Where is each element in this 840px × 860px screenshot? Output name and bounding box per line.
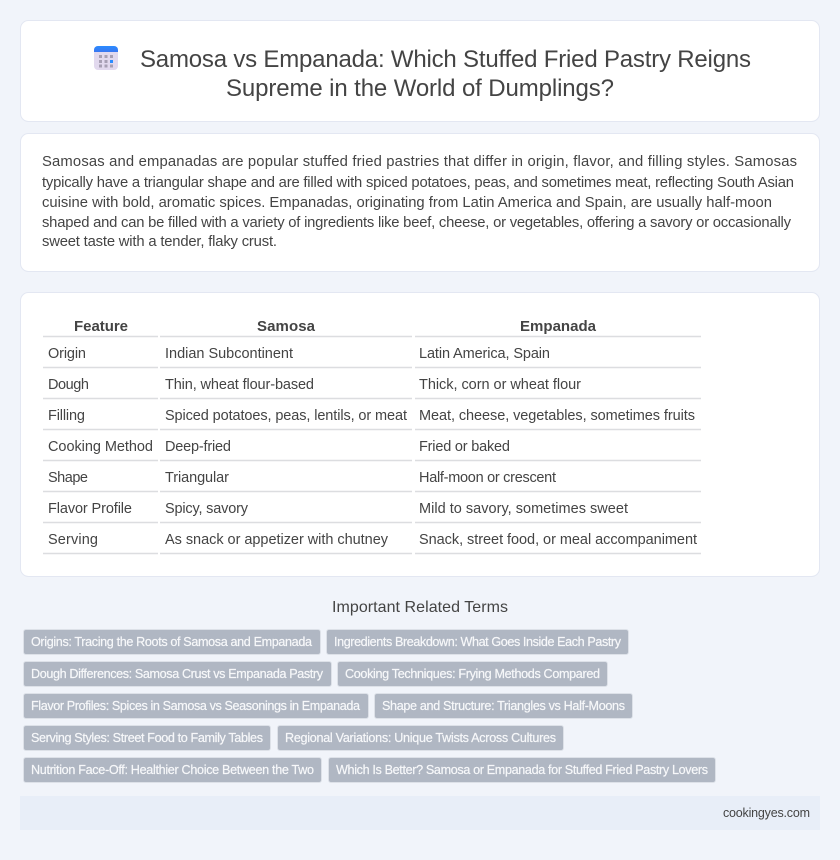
tag: regional: Regional Variations: Unique Twists Across Cultures bbox=[285, 731, 556, 745]
row: filling: Filling bbox=[48, 408, 85, 424]
summary paragraph: sweet taste with a tender, flaky crust. bbox=[42, 234, 277, 250]
title bbox=[140, 46, 751, 102]
related term tags bbox=[24, 630, 716, 782]
row: cooking method bbox=[43, 439, 701, 460]
panel: summary text bbox=[20, 134, 820, 272]
footer bbox=[20, 796, 820, 830]
tag: cooking: Cooking Techniques: Frying Methods Compared bbox=[345, 667, 600, 681]
row: dough: Dough bbox=[48, 377, 89, 393]
row: shape bbox=[43, 470, 701, 492]
tag: regional bbox=[278, 726, 564, 750]
tag: cooking bbox=[338, 662, 608, 686]
footer: cookingyes.com bbox=[723, 806, 810, 820]
tag: flavor bbox=[24, 694, 368, 718]
row: serving: As snack or appetizer with chutney bbox=[165, 532, 389, 548]
row: serving bbox=[43, 532, 701, 554]
heading: related terms: Important Related Terms bbox=[332, 599, 508, 616]
tag: nutrition bbox=[24, 758, 322, 782]
tag: shape bbox=[374, 694, 632, 718]
summary paragraph: Samosas and empanadas are popular stuffed fried pastries that differ in origin, flavor, and filling styles. Samosas bbox=[42, 154, 797, 170]
tag: dough: Dough Differences: Samosa Crust vs Empanada Pastry bbox=[31, 667, 324, 681]
row: flavor profile bbox=[43, 501, 701, 522]
tag: serving: Serving Styles: Street Food to Family Tables bbox=[31, 731, 263, 745]
row: origin: Latin America, Spain bbox=[419, 346, 550, 362]
summary paragraph bbox=[42, 154, 797, 250]
icon: calendar bbox=[94, 46, 118, 70]
tag: ingredients: Ingredients Breakdown: What Goes Inside Each Pastry bbox=[334, 635, 622, 649]
tag: flavor: Flavor Profiles: Spices in Samosa vs Seasonings in Empanada bbox=[31, 699, 360, 713]
row: shape: Triangular bbox=[165, 470, 229, 486]
tag: which is better bbox=[328, 758, 716, 782]
row: origin: Indian Subcontinent bbox=[165, 346, 293, 362]
tag: nutrition: Nutrition Face-Off: Healthier Choice Between the Two bbox=[31, 763, 314, 777]
row: flavor profile: Spicy, savory bbox=[165, 501, 249, 517]
row: dough bbox=[43, 377, 701, 398]
row: filling bbox=[43, 408, 701, 430]
table header: Feature bbox=[74, 318, 128, 335]
row: cooking method: Fried or baked bbox=[419, 439, 510, 455]
row: origin: Origin bbox=[48, 346, 86, 362]
row: dough: Thick, corn or wheat flour bbox=[419, 377, 581, 393]
title: Supreme in the World of Dumplings? bbox=[226, 75, 614, 102]
row: serving: Snack, street food, or meal accompaniment bbox=[419, 532, 697, 548]
tag: ingredients bbox=[326, 630, 628, 654]
row: filling: Spiced potatoes, peas, lentils, or meat bbox=[165, 408, 407, 424]
row: flavor profile: Flavor Profile bbox=[48, 501, 132, 517]
panel: title header bbox=[20, 20, 820, 122]
summary paragraph: typically have a triangular shape and are filled with spiced potatoes, peas, and sometimes meat, reflecting South Asian bbox=[42, 175, 794, 191]
tag: serving bbox=[24, 726, 270, 750]
summary paragraph: cuisine with bold, aromatic spices. Empanadas, originating from Latin America and Spain, are usually half-moon bbox=[42, 195, 772, 211]
row: dough: Thin, wheat flour-based bbox=[165, 377, 314, 393]
row: cooking method: Deep-fried bbox=[165, 439, 231, 455]
row: shape: Half-moon or crescent bbox=[419, 470, 556, 486]
row: origin bbox=[43, 346, 701, 368]
row: cooking method: Cooking Method bbox=[48, 439, 153, 455]
table header: Samosa bbox=[257, 318, 316, 335]
row: shape: Shape bbox=[48, 470, 88, 486]
tag: dough bbox=[24, 662, 332, 686]
summary paragraph: shaped and can be filled with a variety of ingredients like beef, cheese, or vegetables, offering a savory or occasionally bbox=[42, 215, 792, 231]
tag: origins bbox=[24, 630, 320, 654]
tag: which is better: Which Is Better? Samosa or Empanada for Stuffed Fried Pastry Lovers bbox=[336, 763, 708, 777]
table header bbox=[43, 318, 701, 336]
panel: comparison table bbox=[20, 292, 820, 576]
tag: origins: Origins: Tracing the Roots of Samosa and Empanada bbox=[31, 635, 312, 649]
row: flavor profile: Mild to savory, sometimes sweet bbox=[419, 501, 628, 517]
tag: shape: Shape and Structure: Triangles vs Half-Moons bbox=[382, 699, 625, 713]
row: serving: Serving bbox=[48, 532, 98, 548]
title: Samosa vs Empanada: Which Stuffed Fried Pastry Reigns bbox=[140, 46, 751, 73]
table header: Empanada bbox=[520, 318, 597, 335]
row: filling: Meat, cheese, vegetables, sometimes fruits bbox=[419, 408, 695, 424]
